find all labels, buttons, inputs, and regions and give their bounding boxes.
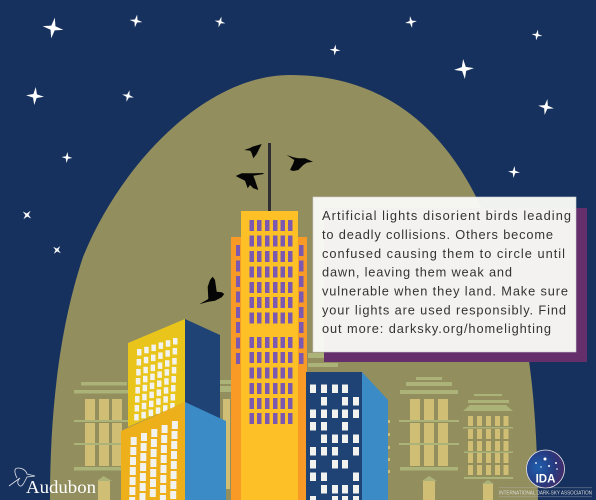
card copy: confused causing them to circle until (322, 246, 565, 261)
icon: egret outline (9, 468, 35, 486)
background building: centre right (388, 377, 459, 500)
Audubon logo (9, 468, 96, 497)
text card shadow (324, 208, 587, 362)
right navy building (306, 372, 388, 500)
stars (19, 13, 555, 257)
card copy: vulnerable when they land. Make sure (322, 284, 568, 298)
background building: far right (463, 394, 513, 500)
card copy: your lights are used responsibly. Find (322, 302, 566, 317)
front building windows (129, 421, 178, 500)
bird: centre left (236, 173, 264, 190)
central tower (231, 211, 307, 500)
birds (199, 144, 313, 304)
IDA logo (499, 450, 592, 497)
card copy: dawn, leaving them weak and (322, 265, 512, 280)
bird: top small (244, 144, 262, 158)
glowing light dome (50, 75, 538, 500)
IDA logo: IDA (536, 473, 555, 485)
text card (313, 197, 576, 352)
navy building windows (310, 384, 359, 500)
tower windows (236, 220, 304, 424)
antenna (268, 143, 271, 212)
left front building (121, 402, 226, 500)
card copy: to deadly collisions. Others become (322, 227, 553, 242)
bird: lower left (199, 277, 224, 304)
bird: top right (287, 155, 313, 171)
card copy (322, 208, 571, 336)
background building: left (74, 353, 338, 500)
Audubon logo: Audubon (26, 477, 96, 497)
left back building (128, 319, 220, 427)
card copy: out more: darksky.org/homelighting (322, 321, 551, 336)
back building windows (134, 338, 178, 420)
card copy: Artificial lights disorient birds leading (322, 208, 571, 223)
